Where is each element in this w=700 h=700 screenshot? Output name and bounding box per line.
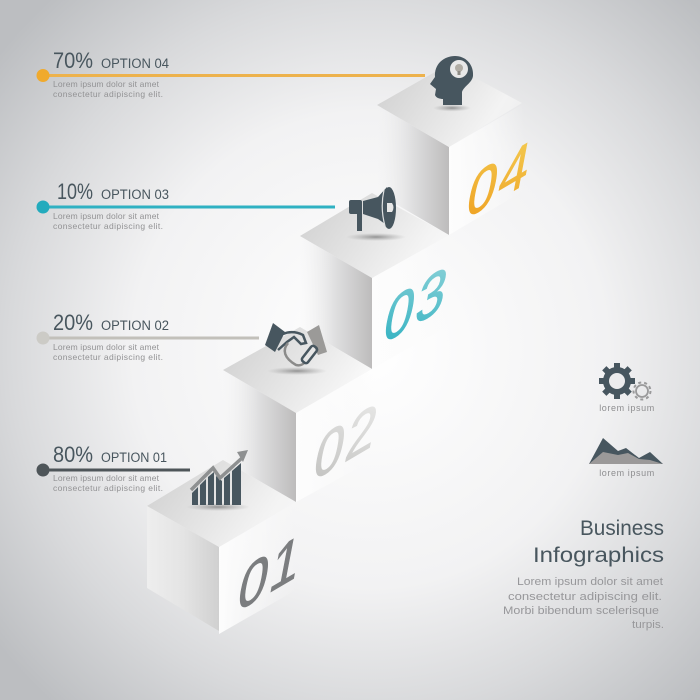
step number 02: 02: [308, 385, 386, 496]
icon: head with light bulb: [430, 56, 473, 112]
icon: mountains: [589, 438, 663, 464]
option 03 row: Lorem ipsum dolor sit amet: [53, 211, 160, 221]
step number 01: 01: [232, 516, 310, 627]
option 03 row: [36, 179, 335, 231]
description: turpis.: [632, 619, 664, 631]
description: [503, 576, 664, 631]
title: Infographics: [533, 544, 664, 567]
icon: rising bar chart: [186, 450, 250, 511]
option 04 row: Lorem ipsum dolor sit amet: [53, 79, 160, 89]
option 03 row: 10%: [57, 179, 93, 204]
description: Lorem ipsum dolor sit amet: [517, 576, 663, 588]
option 02 row: Lorem ipsum dolor sit amet: [53, 342, 160, 352]
cube 01: [147, 460, 296, 634]
option 02 row: 20%: [53, 310, 93, 335]
title: [533, 517, 664, 567]
option 02 row: consectetur adipiscing elit.: [53, 352, 163, 362]
icon: handshake: [265, 323, 327, 375]
icon: gears: [599, 363, 650, 400]
option 01 row: Lorem ipsum dolor sit amet: [53, 473, 160, 483]
step number 03: 03: [378, 248, 456, 359]
option 04 row: consectetur adipiscing elit.: [53, 89, 163, 99]
option 02 row: [36, 310, 259, 362]
step number 04: 04: [461, 123, 539, 234]
cube 04: [377, 64, 525, 235]
gears label: lorem ipsum: [599, 403, 655, 413]
option 03 row: consectetur adipiscing elit.: [53, 221, 163, 231]
option 04 row: OPTION 04: [101, 56, 169, 71]
option 03 row: OPTION 03: [101, 187, 169, 202]
icon: megaphone: [346, 187, 406, 241]
cube 02: [223, 327, 373, 502]
option 01 row: consectetur adipiscing elit.: [53, 483, 163, 493]
option 04 row: [36, 48, 425, 99]
title: Business: [580, 517, 664, 540]
option 01 row: [36, 442, 190, 493]
option 04 row: 70%: [53, 48, 93, 73]
description: Morbi bibendum scelerisque: [503, 605, 659, 617]
option 02 row: OPTION 02: [101, 318, 169, 333]
mountains label: lorem ipsum: [599, 468, 655, 478]
description: consectetur adipiscing elit.: [508, 591, 662, 603]
option 01 row: 80%: [53, 442, 93, 467]
cube 03: [300, 193, 450, 369]
option 01 row: OPTION 01: [101, 450, 167, 465]
